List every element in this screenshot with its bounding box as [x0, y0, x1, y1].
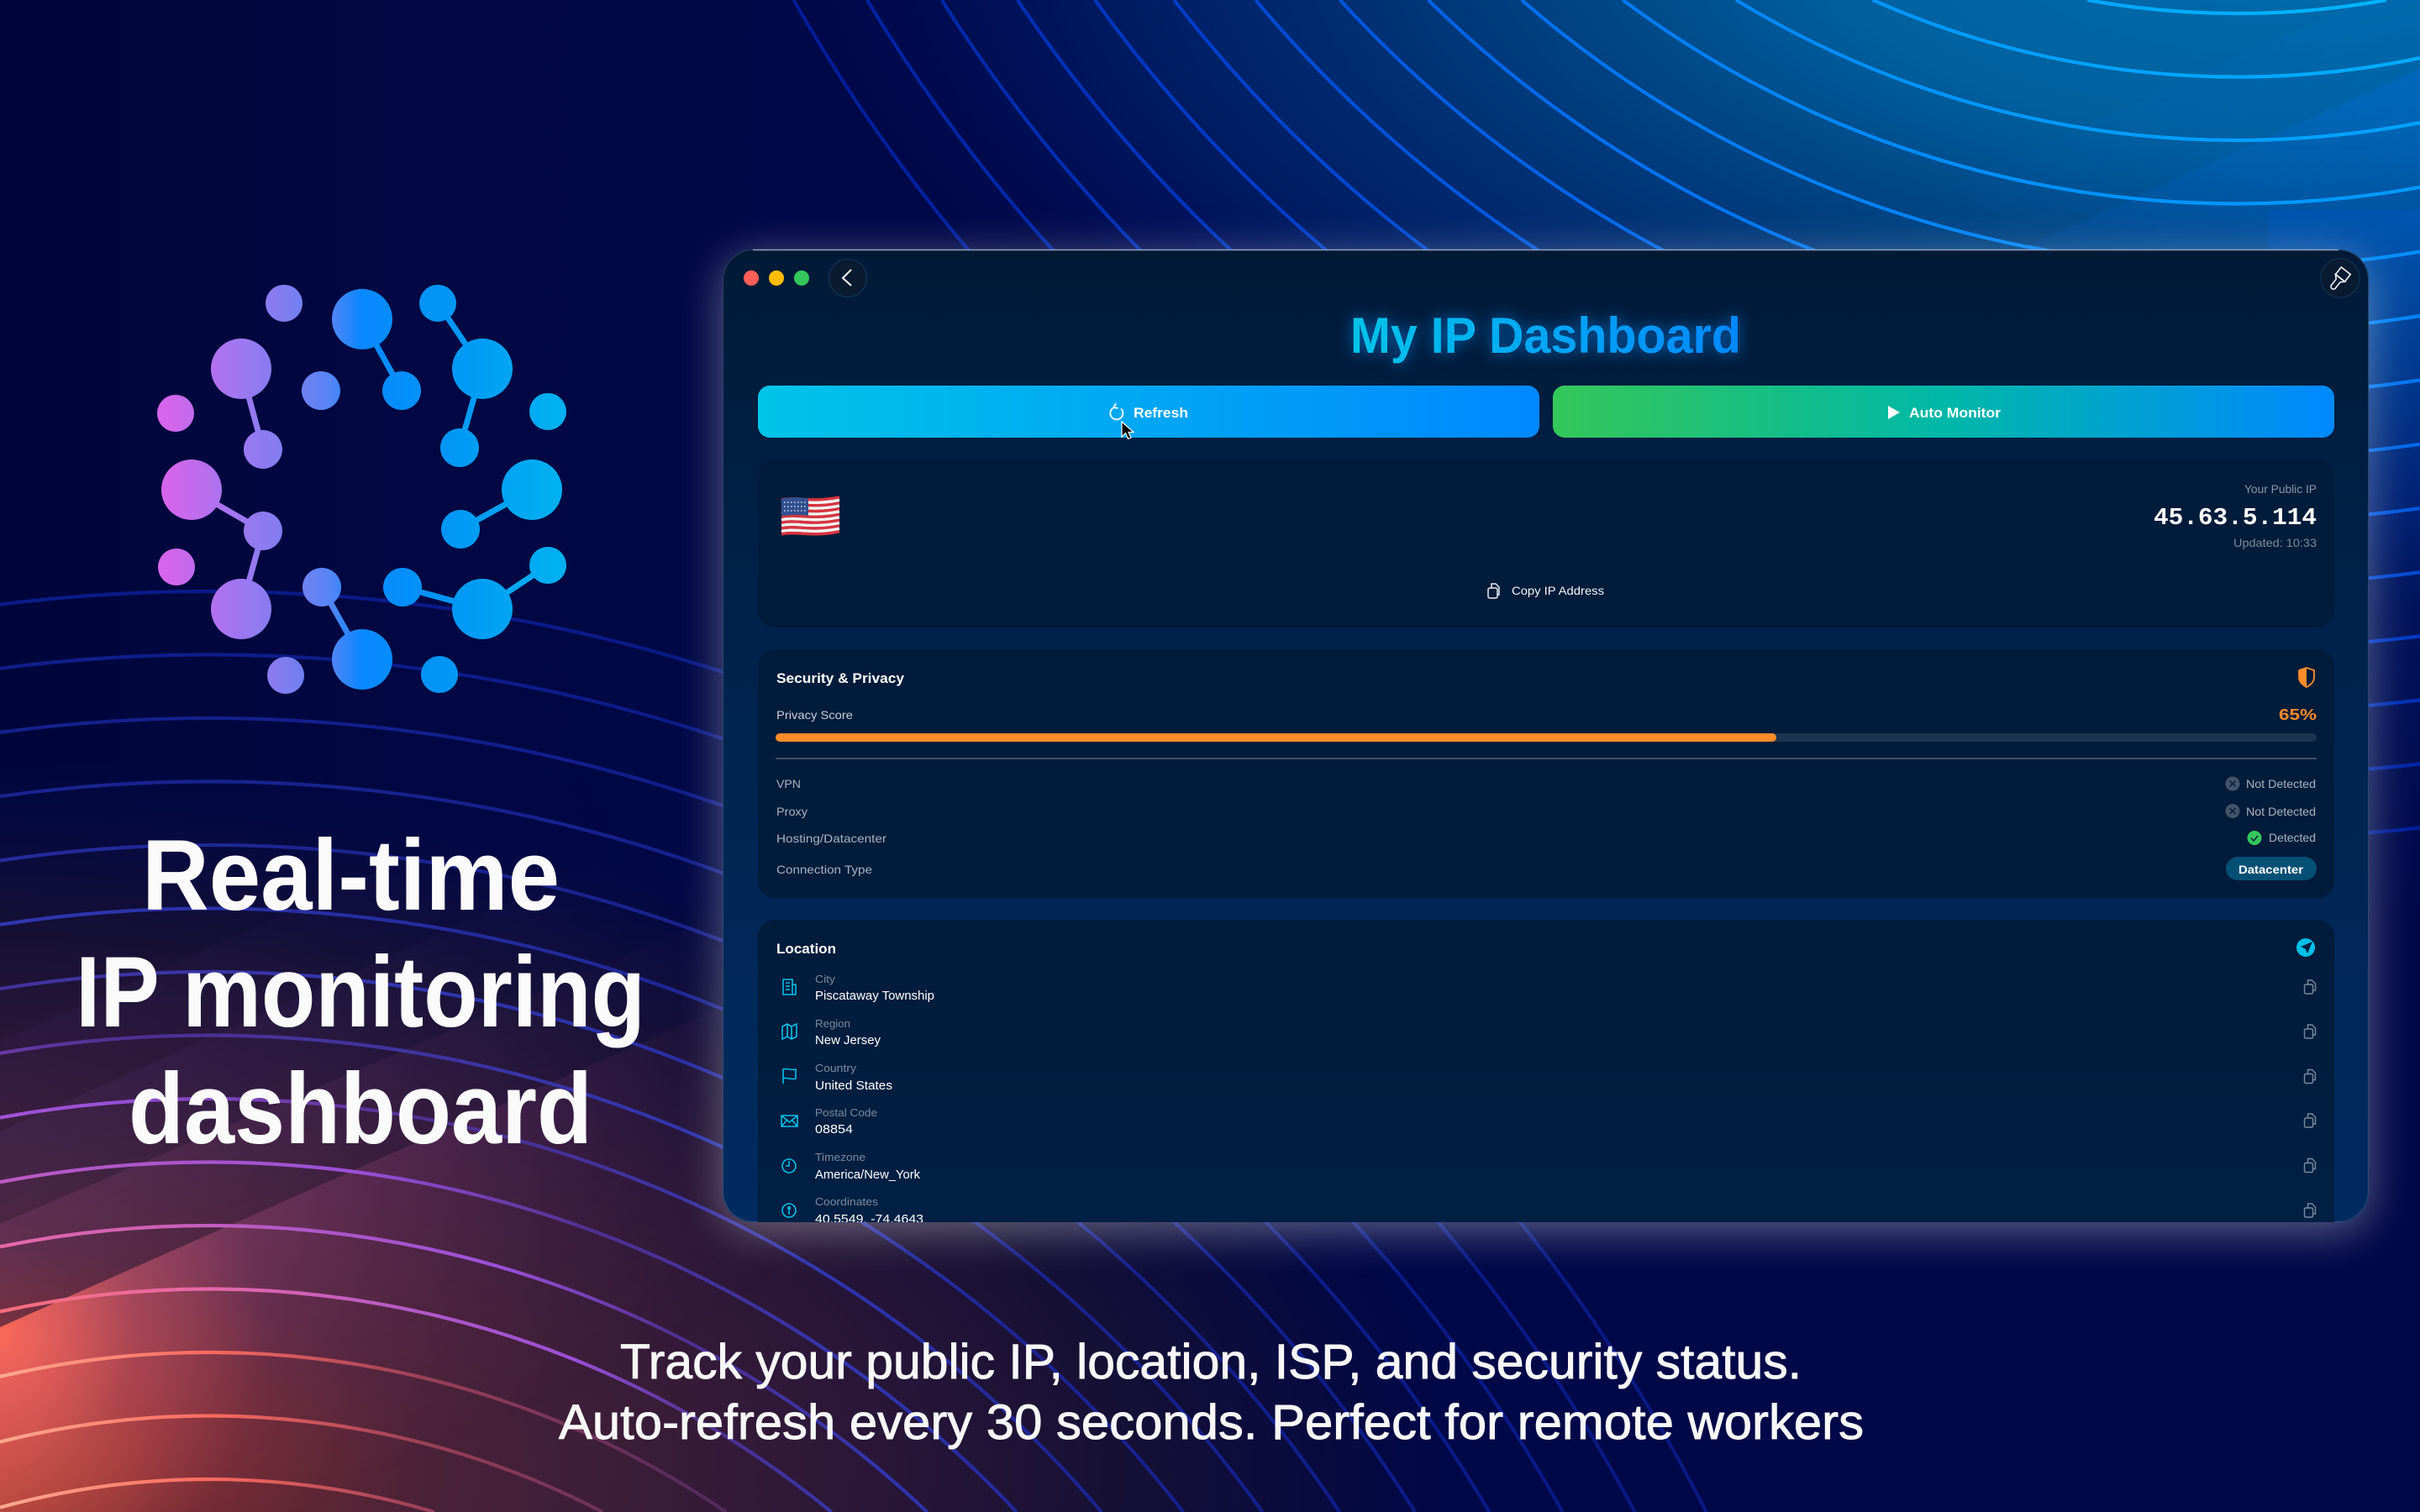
copy IP address: Copy IP Address	[1512, 584, 1604, 597]
location labels	[815, 973, 879, 1208]
location labels: Region	[815, 1017, 850, 1030]
security rows: Connection Type	[776, 863, 872, 876]
panel: security and privacy	[758, 649, 2334, 898]
location labels: Timezone	[815, 1151, 865, 1163]
headline: Real-time	[142, 819, 560, 932]
subtitle	[559, 1335, 1864, 1450]
panel: security and privacy: Security & Privacy	[776, 670, 905, 686]
panel: security and privacy: Privacy Score	[776, 708, 853, 722]
auto monitor button: Auto Monitor	[1909, 405, 2001, 421]
datacenter badge: Datacenter	[2238, 863, 2304, 876]
location values: New Jersey	[815, 1033, 881, 1047]
panel: location: Location	[776, 941, 836, 957]
icon: paintbrush button	[2321, 259, 2360, 297]
location values: 40.5549, -74.4643	[815, 1212, 923, 1226]
security rows: VPN	[776, 777, 801, 790]
icon: US flag	[781, 497, 839, 534]
panel: public IP: Your Public IP	[2244, 482, 2317, 496]
security rows: Not Detected	[2246, 777, 2316, 790]
icon: shield	[2299, 668, 2314, 687]
location labels: Country	[815, 1062, 857, 1074]
headline: dashboard	[129, 1053, 592, 1165]
location values: Piscataway Township	[815, 989, 934, 1003]
panel: public IP: Updated: 10:33	[2233, 536, 2317, 549]
window controls	[744, 259, 867, 297]
security rows	[776, 777, 2316, 876]
panel: public IP: 45.63.5.114	[2154, 504, 2317, 532]
subtitle: Track your public IP, location, ISP, and security status.	[620, 1335, 1802, 1389]
mouse cursor	[1122, 422, 1134, 438]
location icons	[781, 979, 797, 1217]
icon: navigation	[2296, 938, 2315, 957]
status icons	[2225, 776, 2262, 845]
headline: IP monitoring	[76, 936, 645, 1048]
auto monitor button	[1553, 386, 2334, 438]
security rows: Detected	[2269, 831, 2316, 844]
app window	[723, 249, 2369, 1256]
location labels: Coordinates	[815, 1195, 879, 1208]
panel: public IP	[758, 459, 2334, 627]
location labels: City	[815, 973, 836, 985]
headline	[76, 819, 645, 1165]
subtitle: Auto-refresh every 30 seconds. Perfect for remote workers	[559, 1395, 1864, 1450]
copy icons	[2304, 980, 2316, 1217]
refresh button: Refresh	[1134, 405, 1188, 421]
security rows: Not Detected	[2246, 805, 2316, 818]
panel: location	[758, 920, 2334, 1256]
security rows: Proxy	[776, 805, 808, 818]
location values	[815, 989, 934, 1226]
datacenter badge	[2226, 857, 2317, 880]
location labels: Postal Code	[815, 1106, 877, 1119]
panel: security and privacy: 65%	[2279, 706, 2317, 723]
dashboard title: My IP Dashboard	[1350, 307, 1741, 364]
privacy score bar	[776, 733, 2317, 742]
location values: United States	[815, 1079, 892, 1093]
refresh button	[758, 386, 1539, 438]
security rows: Hosting/Datacenter	[776, 832, 886, 845]
logo: network ring	[157, 285, 566, 694]
location values: America/New_York	[815, 1168, 920, 1182]
location values: 08854	[815, 1122, 853, 1137]
